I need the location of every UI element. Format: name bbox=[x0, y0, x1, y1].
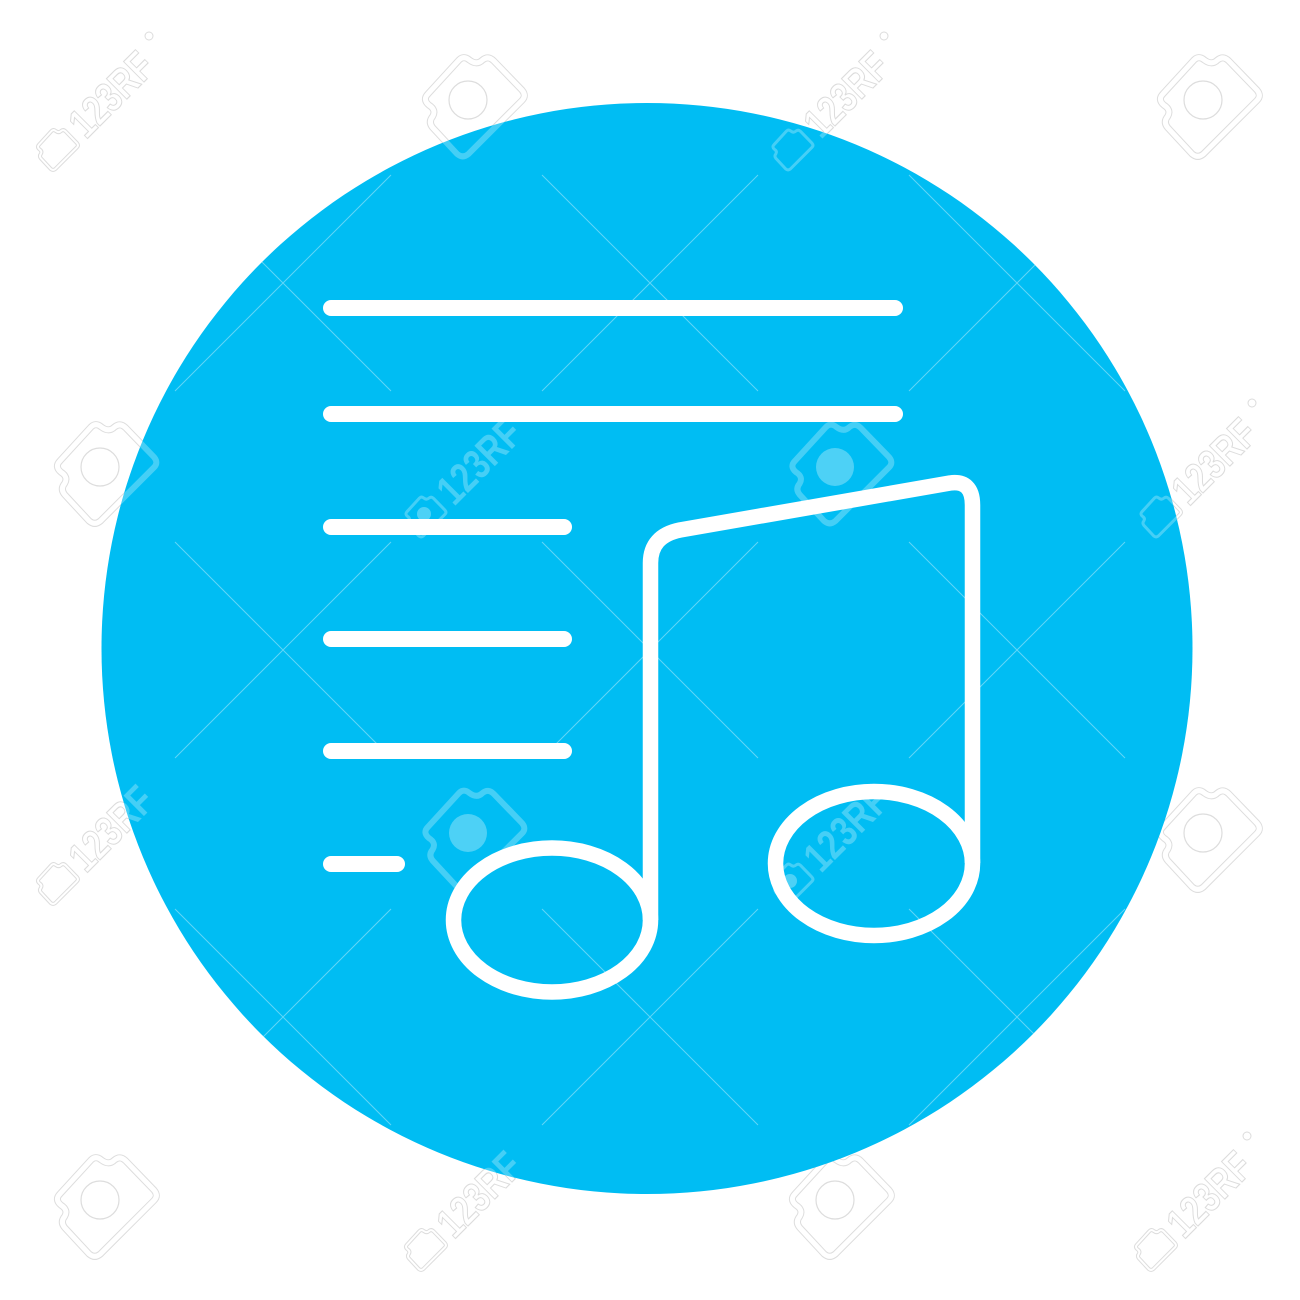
dash bbox=[331, 856, 397, 872]
translucent wordmarks: 123RF bbox=[1162, 409, 1266, 513]
long line two bbox=[331, 406, 895, 422]
blue circle background bbox=[102, 103, 1192, 1194]
translucent wordmarks: 123RF bbox=[59, 776, 163, 880]
translucent wordmarks: 123RF bbox=[1157, 1142, 1261, 1246]
right note head bbox=[776, 792, 972, 936]
watermark wordmarks on white: 123RF bbox=[1162, 409, 1266, 513]
translucent lens discs bbox=[417, 448, 854, 888]
translucent wordmarks: 123RF bbox=[794, 776, 898, 880]
large watermark lens outlines bbox=[81, 81, 1222, 1219]
watermark wordmarks on white: 123RF bbox=[1157, 1142, 1261, 1246]
watermark wordmarks on white: 123RF bbox=[427, 1142, 531, 1246]
translucent wordmarks: 123RF bbox=[427, 1142, 531, 1246]
short line one bbox=[331, 519, 564, 535]
registered marks bbox=[145, 32, 1256, 1140]
watermark wordmarks on white: 123RF bbox=[59, 42, 163, 146]
text lines bbox=[331, 308, 895, 864]
translucent wordmarks: 123RF bbox=[794, 42, 898, 146]
translucent badge outlines bbox=[38, 58, 1181, 904]
small camera logos outline bbox=[38, 130, 1181, 1270]
note stem and beam bbox=[650, 483, 972, 920]
short line two bbox=[331, 631, 564, 647]
translucent wordmarks bbox=[124, 132, 980, 1178]
long line one bbox=[331, 300, 895, 316]
left note head bbox=[454, 848, 650, 992]
watermark layer on blue circle bbox=[120, 122, 1177, 1178]
short line three bbox=[331, 743, 564, 759]
watermark wordmarks on white: 123RF bbox=[794, 42, 898, 146]
translucent wordmarks: 123RF bbox=[427, 409, 531, 513]
music note bbox=[454, 483, 972, 992]
watermark wordmarks on white: 123RF bbox=[59, 776, 163, 880]
